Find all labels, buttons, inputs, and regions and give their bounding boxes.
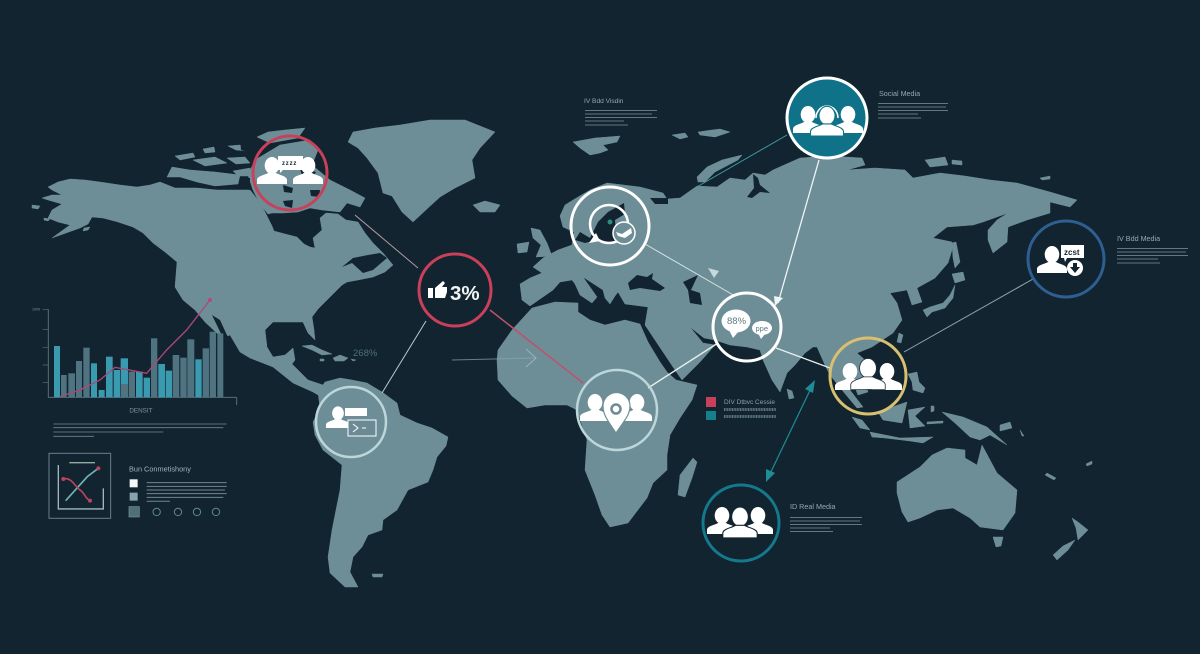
callout: social media — [878, 89, 948, 118]
node: india speech bubbles — [713, 293, 781, 361]
Greenland — [348, 120, 495, 222]
node: east asia chat — [1028, 221, 1104, 297]
bar chart — [32, 298, 237, 436]
node: south america chat — [316, 387, 386, 457]
Sakhalin and Japan — [923, 242, 965, 317]
callout: top centre media: IV Bdd Visdin — [584, 98, 624, 105]
Sri Lanka — [787, 389, 794, 399]
Black Sea — [628, 273, 665, 291]
small legend — [706, 397, 776, 420]
callout: top centre media — [584, 98, 657, 125]
St Lawrence — [342, 253, 387, 273]
Pacific islands — [1020, 430, 1092, 480]
Novaya Zemlya — [697, 155, 742, 182]
node: indian ocean group — [703, 485, 779, 561]
world map — [32, 120, 1092, 587]
node: social media group — [787, 78, 867, 158]
Indonesia — [852, 402, 1012, 445]
node: india speech bubbles: ppe — [756, 324, 768, 333]
callout: lower media: ID Real Media — [790, 502, 836, 511]
White Sea — [650, 198, 668, 204]
Svalbard and Arctic Russia — [573, 129, 730, 155]
bar chart: DENSIT — [129, 408, 153, 415]
node: 3 percent thumbs up: 3% — [450, 282, 480, 305]
Caspian Sea — [683, 275, 702, 305]
node: north america chat — [253, 136, 327, 210]
Madagascar — [678, 458, 697, 497]
South America — [313, 378, 448, 587]
mini line chart panel — [49, 453, 111, 518]
Australia — [897, 445, 1017, 530]
Arctic channels — [240, 137, 320, 208]
Eurasia — [520, 156, 1077, 408]
node: europe chat — [571, 187, 649, 265]
Ob gulf — [747, 174, 770, 198]
connector lines — [355, 135, 1033, 478]
Africa — [497, 302, 697, 527]
Cuba and Caribbean — [302, 345, 356, 361]
callout: social media: Social Media — [879, 89, 920, 98]
Iceland — [473, 201, 500, 212]
New Siberian islands — [925, 157, 1050, 180]
Taiwan and Philippines — [897, 333, 925, 393]
New Zealand — [1053, 518, 1088, 560]
bar chart: 1000 — [32, 308, 40, 312]
arrowheads — [708, 268, 815, 482]
node: southeast asia group — [830, 338, 906, 414]
legend panel: Bun Conmetishony — [129, 465, 191, 474]
callout: right media — [1117, 234, 1188, 263]
Aleutians — [32, 205, 90, 231]
node: india speech bubbles: 88% — [727, 316, 747, 327]
small legend: DIV Dtbvc Cessie — [724, 399, 775, 406]
Falkland Islands — [372, 574, 383, 577]
node: africa location pin — [577, 370, 657, 450]
Tasmania — [993, 537, 1003, 547]
Arctic islands — [167, 128, 305, 186]
Gulf of California — [212, 315, 231, 344]
callout: right media: IV Bdd Media — [1117, 234, 1160, 243]
Britain and Ireland — [517, 228, 552, 257]
percentage label: 268% — [353, 348, 378, 359]
callout: lower media — [790, 502, 862, 532]
Arctic Canada — [248, 140, 365, 214]
North America — [42, 179, 393, 395]
node: 3 percent thumbs up — [419, 254, 491, 326]
inland seas — [212, 137, 770, 344]
node: east asia chat: zcst — [1064, 248, 1080, 257]
legend panel — [129, 465, 227, 517]
node: north america chat: zzzz — [282, 161, 297, 167]
Baltic Sea — [575, 203, 625, 243]
